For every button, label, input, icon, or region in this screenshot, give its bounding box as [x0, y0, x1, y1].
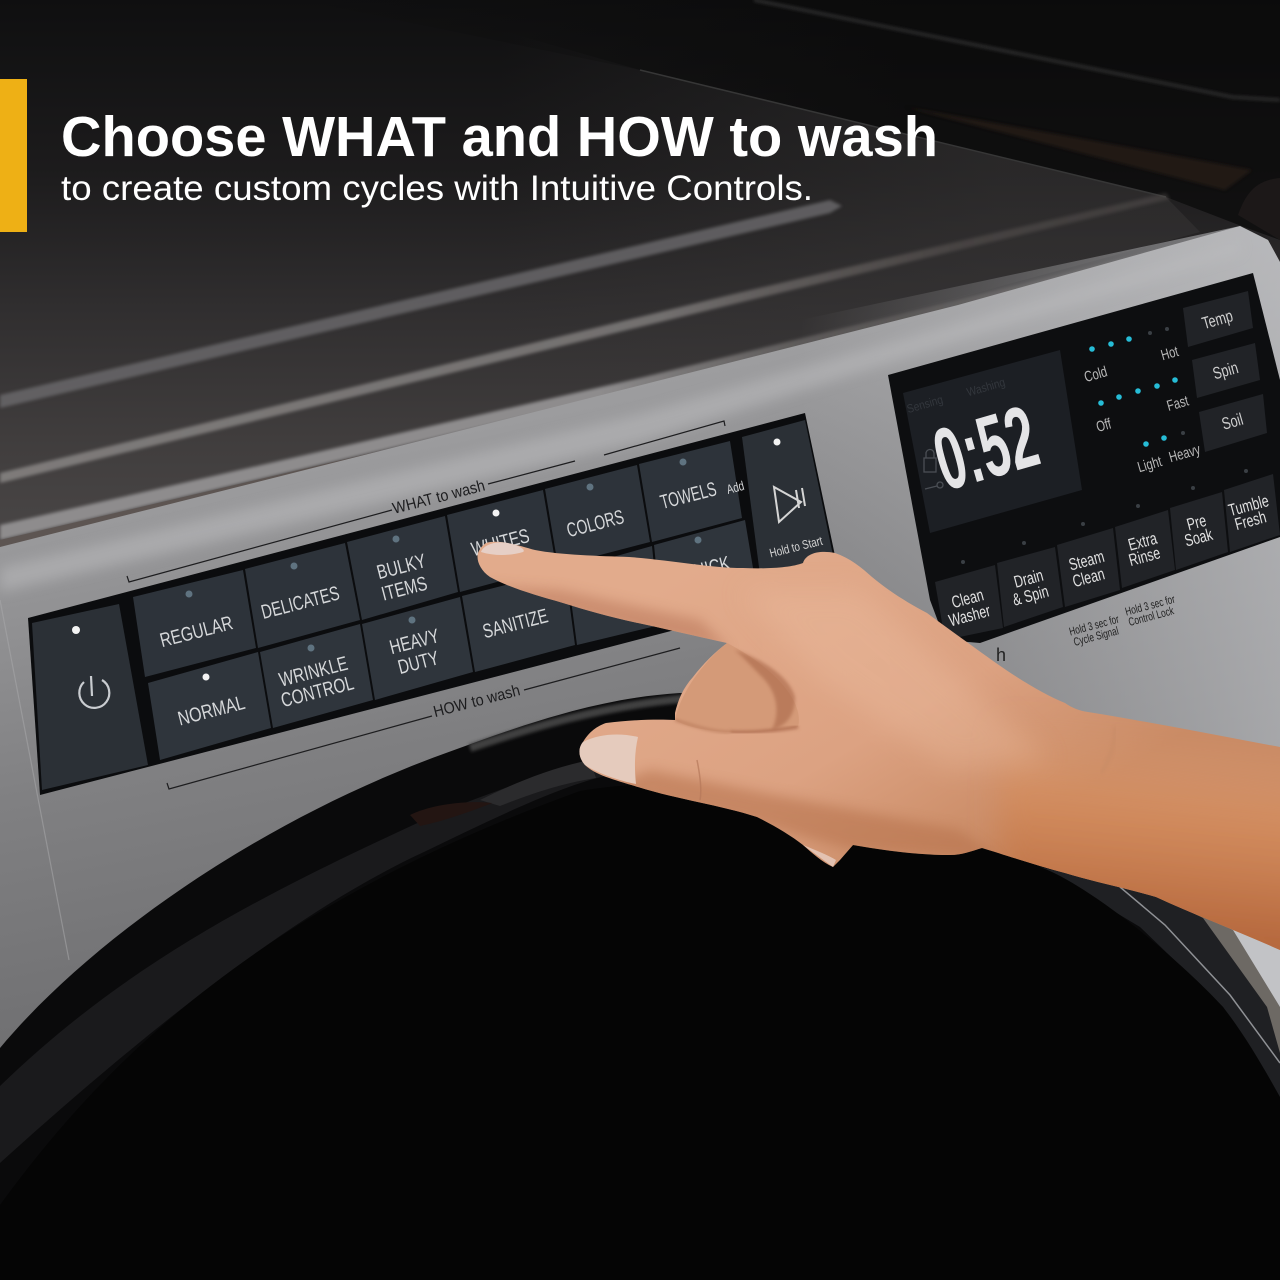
option buttons: Light	[1136, 453, 1164, 476]
button labels: CONTROL	[279, 671, 356, 712]
option buttons: Soil	[1220, 410, 1245, 434]
washer front metal panel	[0, 226, 1280, 1100]
cycle option buttons: Pre	[1185, 512, 1209, 535]
button labels: QUICK	[680, 552, 733, 585]
option buttons: Spin	[1211, 358, 1241, 384]
background: washer top surface	[0, 0, 1280, 600]
LCD time display	[903, 350, 1082, 533]
nail: thumb	[579, 734, 638, 784]
option buttons: Fast	[1165, 392, 1191, 414]
cycle option buttons: Clean	[950, 587, 986, 613]
button labels: DUTY	[395, 646, 441, 679]
display and option panel	[888, 273, 1280, 665]
display and option panel: h	[996, 645, 1006, 665]
subtitle: to create custom cycles with Intuitive Controls.	[61, 169, 813, 208]
cycle option buttons: Soak	[1183, 526, 1215, 551]
cycle option buttons: Rinse	[1127, 545, 1162, 571]
option buttons	[961, 291, 1267, 564]
start button: Hold to Start	[768, 535, 825, 561]
hand shading	[506, 584, 1280, 950]
cycle option buttons: Fresh	[1233, 509, 1268, 535]
nail: curled finger	[803, 845, 836, 867]
cycle option buttons: Steam	[1067, 548, 1106, 575]
cycle option buttons: Drain	[1012, 567, 1045, 592]
hold notes: Hold 3 sec for	[1124, 593, 1177, 619]
option buttons: Temp	[1200, 307, 1235, 334]
hold notes: Hold 3 sec for	[1068, 613, 1121, 639]
control panel: cycle buttons	[28, 413, 838, 795]
button labels: BULKY	[374, 549, 428, 584]
button labels: NORMAL	[175, 691, 247, 730]
button labels: SANITIZE	[480, 604, 550, 643]
cycle option buttons	[935, 474, 1280, 640]
hold notes: Cycle Signal	[1072, 625, 1120, 649]
cycle option buttons: Clean	[1071, 566, 1107, 592]
door glass	[0, 783, 1280, 1280]
accent bar	[0, 79, 27, 232]
cycle option buttons: Extra	[1126, 530, 1160, 555]
hold notes	[1068, 593, 1177, 649]
LCD time display: Washing	[965, 376, 1007, 400]
control panel: cycle buttons: Add	[725, 480, 746, 497]
lock icon	[924, 449, 943, 489]
button labels: WHITES	[469, 524, 532, 561]
label: HOW to wash: HOW to wash	[432, 682, 522, 721]
hand pressing button	[478, 542, 1280, 990]
cycle option buttons: Washer	[947, 602, 993, 631]
LCD time display: 0:52	[923, 386, 1048, 509]
button labels: DELICATES	[259, 581, 342, 623]
button labels: WRINKLE	[277, 652, 350, 691]
cycle option buttons: & Spin	[1011, 583, 1051, 610]
power button	[32, 604, 148, 790]
button labels	[158, 478, 733, 730]
washer door ring	[0, 693, 1280, 1280]
title	[61, 105, 938, 208]
button labels: HEAVY	[387, 624, 442, 659]
label: WHAT to wash	[127, 421, 725, 582]
button labels: ITEMS	[379, 572, 430, 605]
cycle option buttons: Tumble	[1227, 492, 1271, 521]
hold notes: Control Lock	[1127, 605, 1176, 629]
option buttons: Cold	[1082, 363, 1109, 385]
button labels: TOWELS	[658, 478, 719, 514]
button labels: COLORS	[564, 505, 626, 542]
label: WHAT to wash: WHAT to wash	[391, 477, 487, 518]
title: Choose WHAT and HOW to wash	[61, 105, 938, 169]
button labels: REGULAR	[158, 611, 235, 652]
label: HOW to wash	[167, 648, 680, 789]
nail: index finger	[481, 542, 524, 555]
option buttons: Off	[1094, 415, 1113, 435]
option buttons: Hot	[1159, 342, 1181, 364]
option buttons: Heavy	[1167, 440, 1203, 466]
LCD time display: Sensing	[906, 394, 945, 416]
start button	[742, 420, 835, 590]
